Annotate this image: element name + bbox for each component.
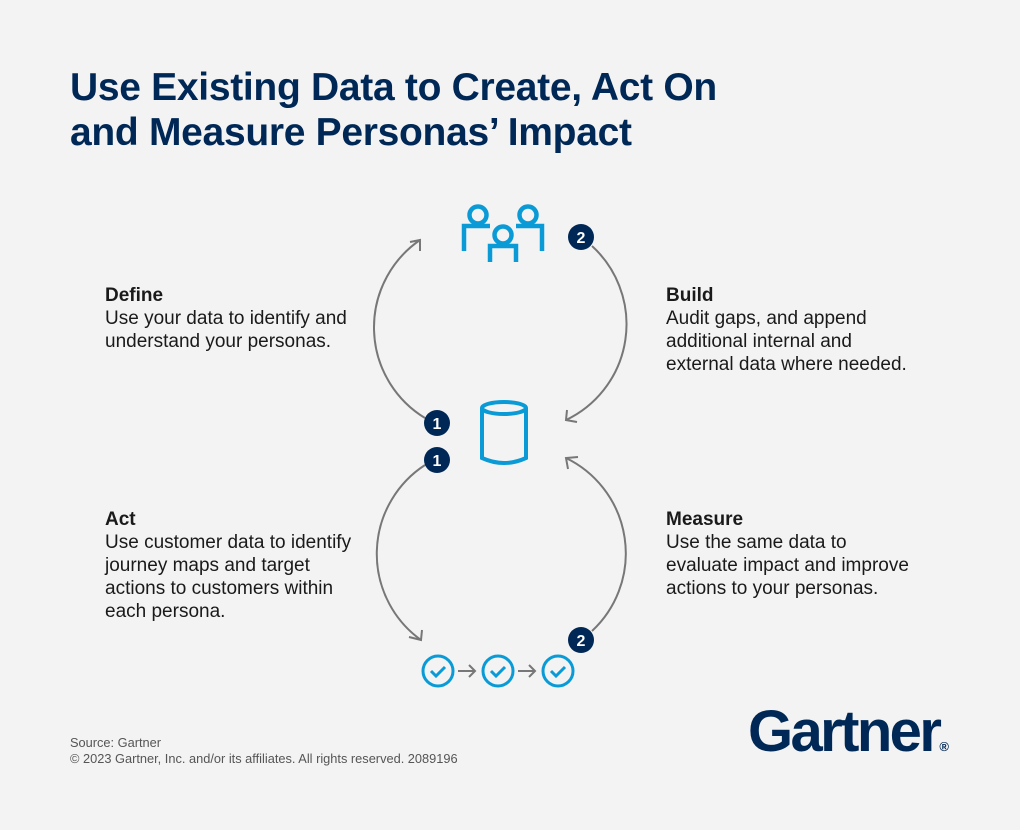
badges [424, 224, 594, 653]
title: and Measure Personas’ Impact [70, 111, 632, 154]
logo: Gartner® [748, 699, 949, 764]
title: Use Existing Data to Create, Act On [70, 66, 717, 109]
source: Source: Gartner [70, 735, 161, 750]
arrows [374, 240, 627, 640]
badges: 1 [433, 453, 442, 470]
text: define [105, 285, 347, 352]
text: define: Use your data to identify and understand your personas. [105, 308, 347, 352]
text: act: Use customer data to identify journey maps and target actions to customers within each persona. [105, 532, 351, 622]
source: © 2023 Gartner, Inc. and/or its affiliates. All rights reserved. 2089196 [70, 751, 458, 766]
badges: 2 [577, 230, 586, 247]
text: define: Define [105, 285, 163, 306]
text: measure: Use the same data to evaluate impact and improve actions to your personas. [666, 532, 909, 599]
title [70, 66, 717, 154]
text: build: Build [666, 285, 714, 306]
badges: 2 [577, 633, 586, 650]
icon: checklist [423, 656, 573, 686]
text: act: Act [105, 509, 136, 530]
source [70, 735, 458, 766]
badges: 1 [433, 416, 442, 433]
text: measure: Measure [666, 509, 743, 530]
icon: people [464, 206, 542, 262]
text: build: Audit gaps, and append additional internal and external data where needed. [666, 308, 907, 375]
icon: database [482, 402, 526, 463]
